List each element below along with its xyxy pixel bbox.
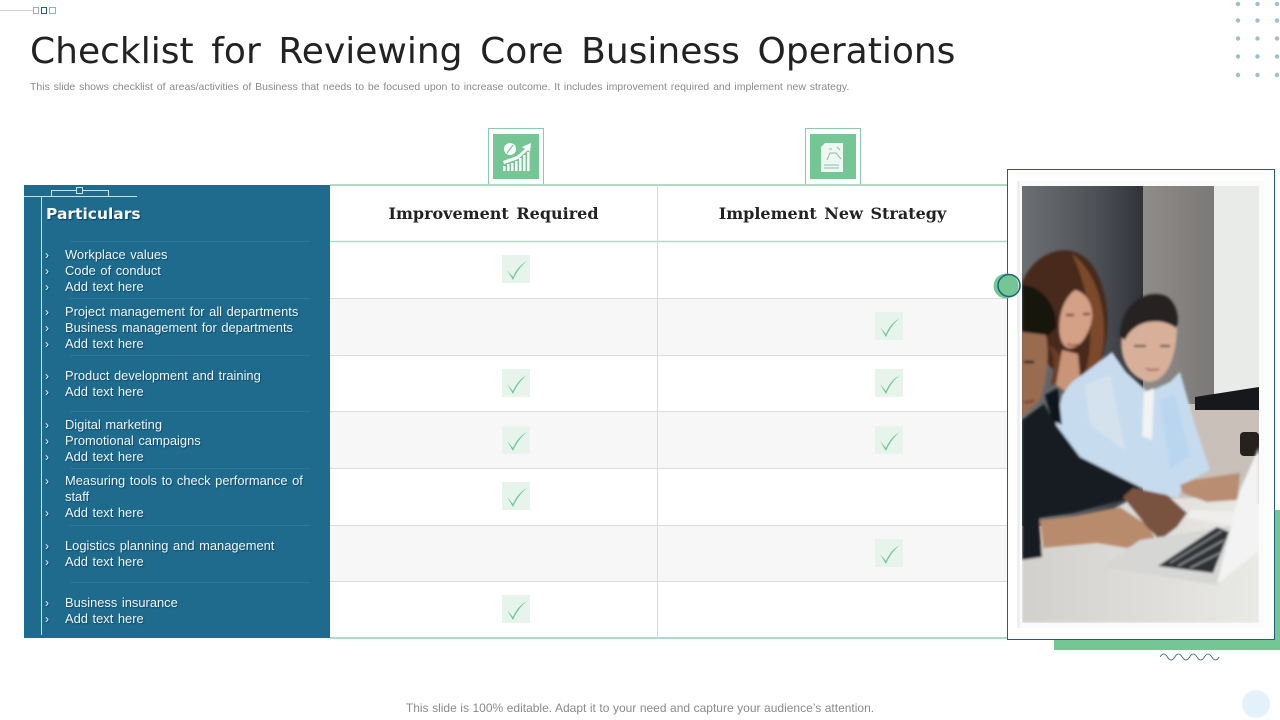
table (1022, 498, 1259, 623)
row 2 particulars: Project management for all departments (65, 304, 298, 319)
row 7 particulars (45, 595, 178, 626)
row 3 particulars: Product development and training (65, 368, 261, 383)
woman one face (1059, 290, 1092, 348)
row 2 particulars: Business management for departments (65, 320, 293, 335)
sidebar heading: Particulars (46, 205, 141, 223)
row 3 particulars (45, 368, 262, 399)
row 4 particulars (45, 417, 202, 464)
woman two shirt (1056, 352, 1210, 498)
row shading (330, 298, 1008, 355)
row 1 particulars: Code of conduct (65, 263, 161, 278)
row 6 particulars (45, 538, 276, 569)
row 6 particulars: › (45, 539, 49, 553)
checkmark: row 1 improvement (502, 255, 530, 283)
man hair and face (1022, 285, 1056, 336)
row 4 particulars: Add text here (65, 449, 144, 464)
footer note: This slide is 100% editable. Adapt it to your need and capture your audience’s attention. (406, 701, 874, 715)
decoration: wave line (1160, 654, 1220, 660)
checkmark: row 5 improvement (502, 482, 530, 510)
panel: particulars sidebar (24, 185, 330, 638)
title: Checklist for Reviewing Core Business Operations (30, 31, 955, 72)
checkmark: row 6 strategy (875, 539, 903, 567)
row 7 particulars: Business insurance (65, 595, 178, 610)
icon: strategy document (805, 128, 861, 185)
decoration: top-right dot grid (1236, 2, 1280, 78)
panel: checklist table (330, 184, 1007, 639)
photo: team working at a laptop (1017, 181, 1259, 628)
row 3 particulars: › (45, 369, 49, 383)
row 2 particulars: › (45, 305, 49, 319)
row 5 particulars: Add text here (65, 505, 144, 520)
lower hand (1040, 507, 1155, 548)
subtitle: This slide shows checklist of areas/activities of Business that needs to be focused upon to increase outcome. It includes improvement required and implement new strategy. (30, 81, 849, 93)
photo frame (1007, 169, 1275, 640)
row 4 particulars: › (45, 418, 49, 432)
row 2 particulars: Add text here (65, 336, 144, 351)
icon: improvement growth chart (488, 128, 544, 185)
laptop screen (1217, 447, 1259, 584)
row 5 particulars (45, 473, 304, 520)
checkmark: row 3 strategy (875, 369, 903, 397)
column heading: improvement required: Improvement Required (388, 204, 599, 223)
row 1 particulars: › (45, 280, 49, 294)
row 2 particulars: › (45, 337, 49, 351)
checkmark: row 4 strategy (875, 426, 903, 454)
row 5 particulars: Measuring tools to check performance of (65, 473, 303, 488)
green backing block behind photo (1054, 510, 1280, 650)
right forearm (1180, 473, 1240, 502)
row 6 particulars: › (45, 555, 49, 569)
column heading: implement new strategy: Implement New Strategy (719, 204, 946, 223)
sidebar bracket lines (24, 187, 137, 635)
row 1 particulars (45, 247, 168, 294)
table rules (330, 184, 1007, 639)
row 1 particulars: Add text here (65, 279, 144, 294)
sidebar row dividers (70, 241, 310, 583)
decoration: pale blue circle (1242, 690, 1270, 718)
row 4 particulars: › (45, 450, 49, 464)
row 1 particulars: › (45, 264, 49, 278)
checkmark: row 4 improvement (502, 426, 530, 454)
upper hand (1123, 488, 1187, 540)
row 5 particulars: staff (65, 489, 89, 504)
woman two face and hair (1121, 322, 1177, 382)
checkmark: row 3 improvement (502, 369, 530, 397)
row 6 particulars: Add text here (65, 554, 144, 569)
row 7 particulars: › (45, 612, 49, 626)
connector circle on frame (994, 274, 1021, 298)
checkmark: row 2 strategy (875, 312, 903, 340)
row 6 particulars: Logistics planning and management (65, 538, 274, 553)
paper on table (1189, 510, 1232, 523)
woman one hair (1022, 250, 1108, 388)
decoration: top-left line and squares (0, 7, 56, 14)
checkmark: row 7 improvement (502, 595, 530, 623)
man jacket (1022, 404, 1140, 560)
row 3 particulars: › (45, 385, 49, 399)
row 7 particulars: › (45, 596, 49, 610)
row 5 particulars: › (45, 474, 49, 488)
row 2 particulars (45, 304, 299, 351)
row 2 particulars: › (45, 321, 49, 335)
row 4 particulars: Digital marketing (65, 417, 162, 432)
row 5 particulars: › (45, 506, 49, 520)
row 7 particulars: Add text here (65, 611, 144, 626)
row 1 particulars: › (45, 248, 49, 262)
row 3 particulars: Add text here (65, 384, 144, 399)
laptop base (1131, 526, 1230, 584)
row 4 particulars: › (45, 434, 49, 448)
row 1 particulars: Workplace values (65, 247, 168, 262)
row 4 particulars: Promotional campaigns (65, 433, 201, 448)
